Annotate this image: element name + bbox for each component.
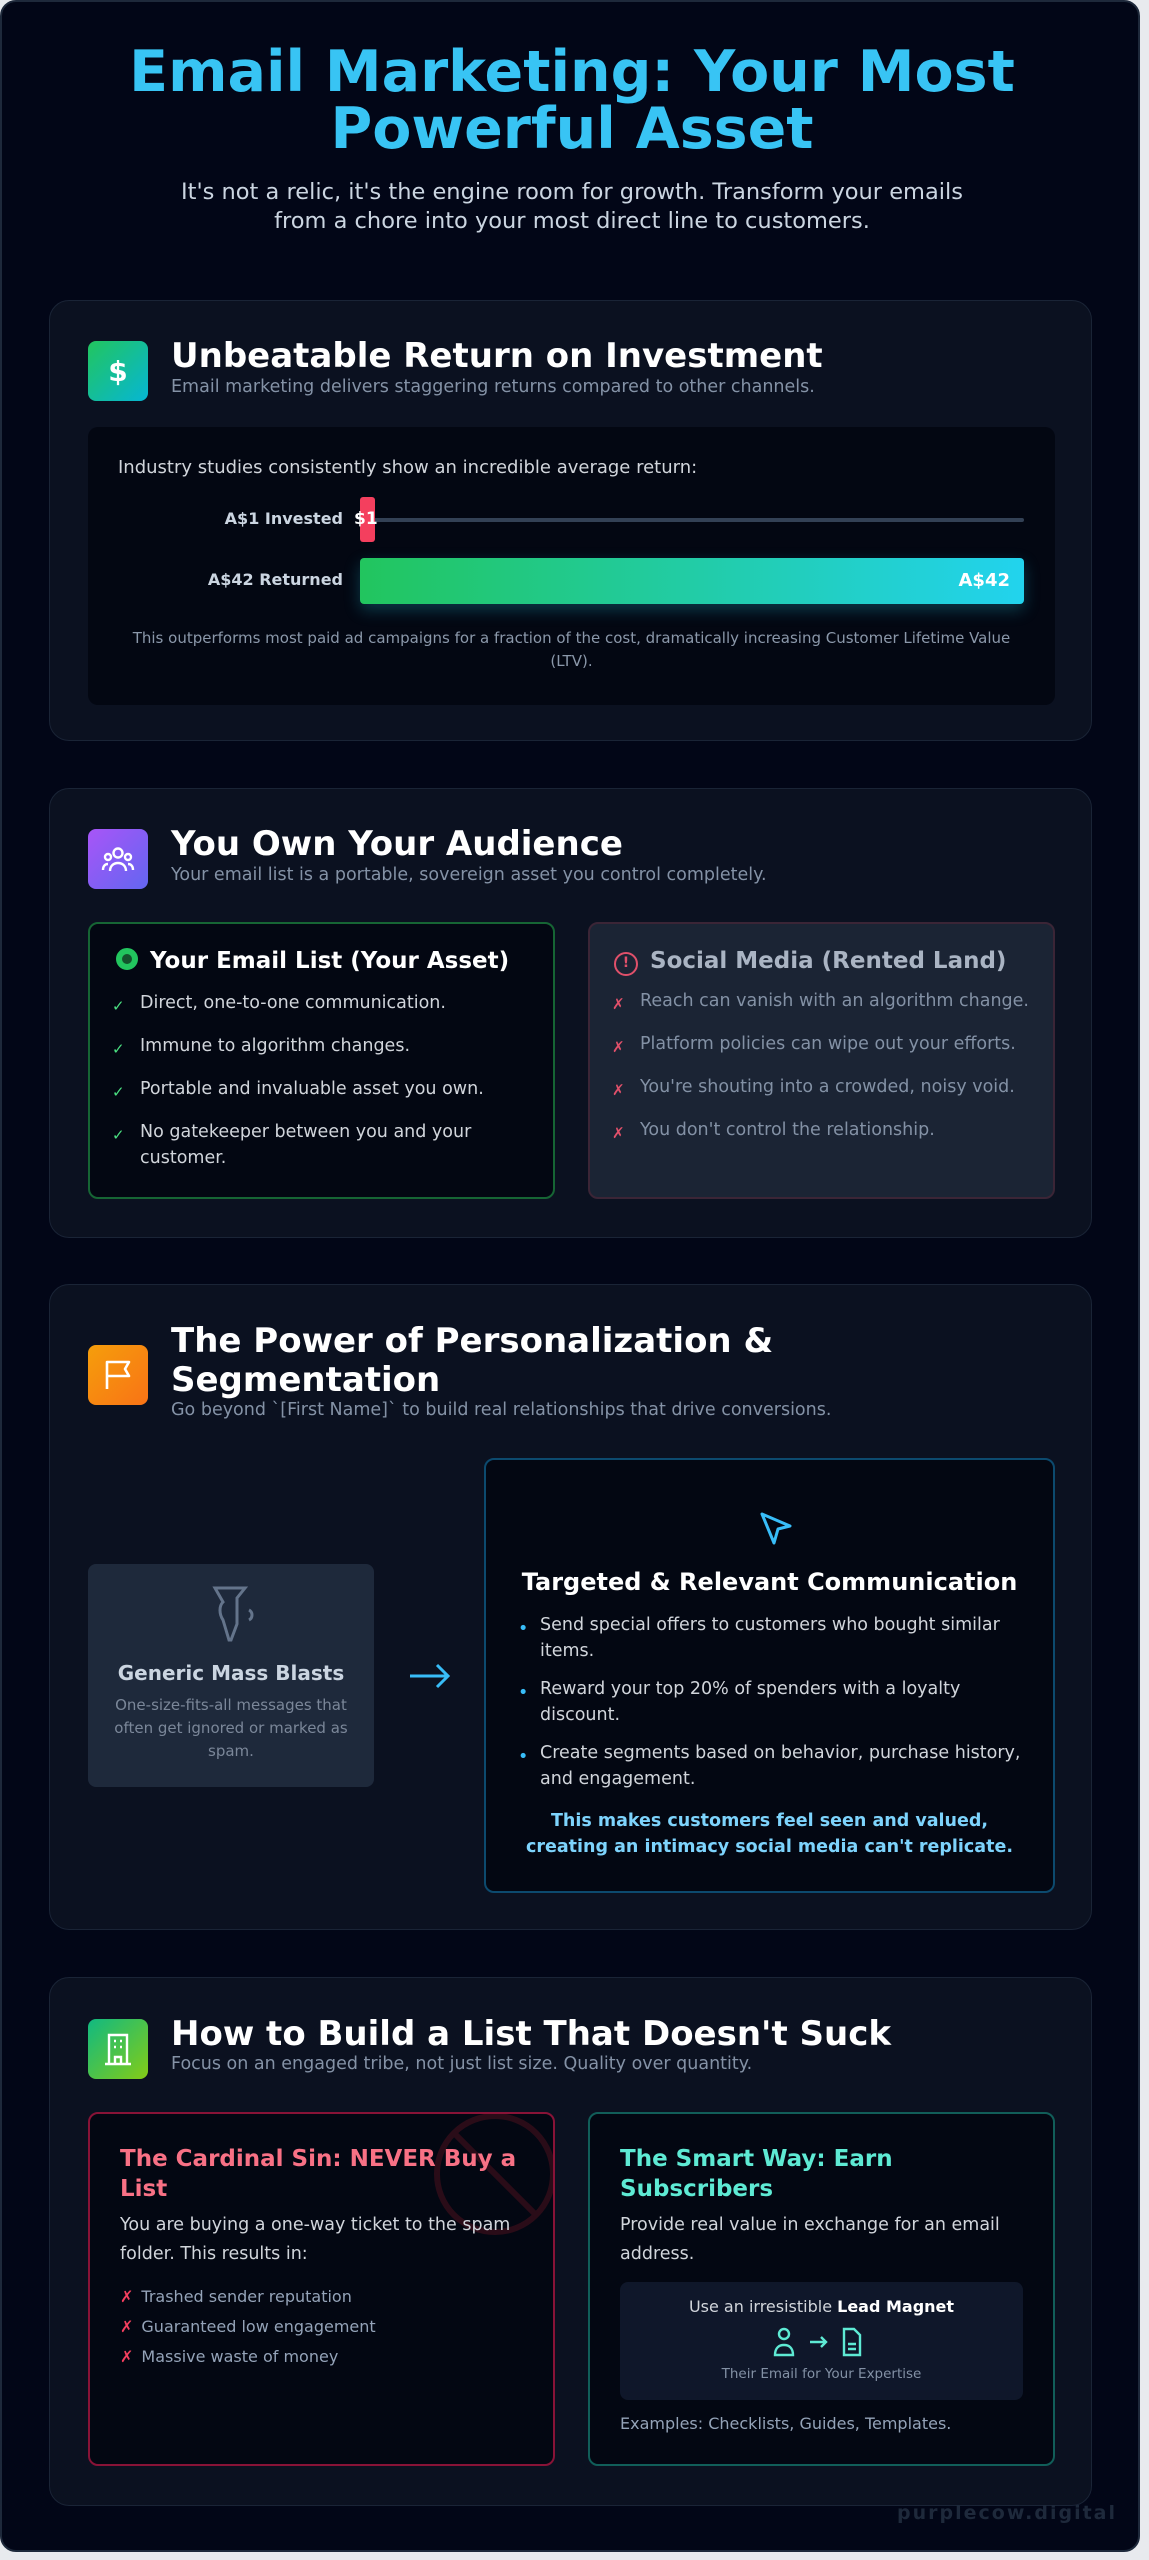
card: targeted xyxy=(484,1458,1055,1893)
heading: own audience: You Own Your Audience xyxy=(171,824,623,864)
card: smart way xyxy=(588,2112,1055,2466)
card: cardinal sin xyxy=(88,2112,555,2466)
list: risks: ✗ xyxy=(612,1124,625,1142)
panel: personalization xyxy=(49,1284,1092,1930)
list: risks: ✗ xyxy=(612,995,625,1013)
bar: returned: A$42 xyxy=(958,570,1010,591)
card text: Provide real value in exchange for an email address. xyxy=(620,2215,1000,2264)
list: risks xyxy=(612,991,1029,1142)
callout: This makes customers feel seen and valued, xyxy=(551,1811,988,1831)
bar: invested: A$1 Invested xyxy=(225,509,343,528)
card title: The Smart Way: Earn Subscribers xyxy=(620,2146,893,2202)
card description: One-size-fits-all messages that often get ignored or marked as spam. xyxy=(114,1696,348,1760)
list: benefits: Direct, one-to-one communication. xyxy=(140,993,446,1013)
card: social media xyxy=(588,922,1055,1199)
list: benefits: Immune to algorithm changes. xyxy=(140,1036,410,1056)
list: benefits: No gatekeeper between you and your customer. xyxy=(140,1122,471,1168)
icon: dollar xyxy=(88,341,148,401)
icon: megaphone xyxy=(212,1586,254,1642)
list: benefits xyxy=(112,993,484,1168)
card heading: Your Email List (Your Asset) xyxy=(150,948,509,974)
heading: personalization xyxy=(171,1321,773,1400)
list: risks: You don't control the relationship. xyxy=(640,1120,935,1140)
list: benefits: ✓ xyxy=(112,1040,125,1058)
callout: creating an intimacy social media can't replicate. xyxy=(526,1837,1013,1857)
list: risks: Reach can vanish with an algorithm change. xyxy=(640,991,1029,1011)
heading: personalization: Segmentation xyxy=(171,1360,440,1400)
list: consequences: ✗ Trashed sender reputation xyxy=(120,2287,352,2306)
lead magnet box xyxy=(620,2282,1023,2400)
bar: invested xyxy=(224,497,1024,542)
list: tactics: • xyxy=(518,1619,528,1639)
list: consequences: ✗ Massive waste of money xyxy=(120,2347,338,2366)
list: consequences: ✗ Guaranteed low engagement xyxy=(120,2317,376,2336)
panel: own audience xyxy=(49,788,1092,1238)
bar: invested: $1 xyxy=(354,509,378,529)
list: benefits: ✓ xyxy=(112,1126,125,1144)
card text: You are buying a one-way ticket to the spam folder. This results in: xyxy=(120,2215,510,2264)
list: benefits: Portable and invaluable asset you own. xyxy=(140,1079,484,1099)
callout xyxy=(526,1811,1013,1857)
list: benefits: ✓ xyxy=(112,1083,125,1101)
list: benefits: ✓ xyxy=(112,997,125,1015)
list: tactics xyxy=(518,1615,1020,1789)
subtitle: It's not a relic, it's the engine room for growth. Transform your emails xyxy=(181,179,963,205)
watermark: purplecow.digital xyxy=(897,2502,1117,2524)
heading: How to Build a List That Doesn't Suck xyxy=(171,2014,891,2054)
list: tactics: • xyxy=(518,1683,528,1703)
panel: ROI xyxy=(49,300,1092,741)
card title: The Cardinal Sin: NEVER Buy a List xyxy=(120,2146,516,2202)
icon: prohibited (decorative watermark) xyxy=(434,2114,553,2235)
chart footnote: This outperforms most paid ad campaigns for a fraction of the cost, dramatically increasing Customer Lifetime Value (LTV). xyxy=(133,629,1010,670)
list: risks: You're shouting into a crowded, noisy void. xyxy=(640,1077,1015,1097)
lead magnet box: Their Email for Your Expertise xyxy=(722,2366,921,2382)
list: tactics: • xyxy=(518,1747,528,1767)
icon: dollar: $ xyxy=(108,354,128,388)
list: tactics: Create segments based on behavior, purchase history, and engagement. xyxy=(540,1743,1020,1789)
card heading: Social Media (Rented Land) xyxy=(650,948,1006,974)
heading: ROI: Unbeatable Return on Investment xyxy=(171,336,823,376)
list: tactics: Send special offers to customers who bought similar items. xyxy=(540,1615,1000,1661)
subtitle xyxy=(181,179,963,234)
subheading: ROI: Email marketing delivers staggering returns compared to other channels. xyxy=(171,377,815,397)
chart: ROI bars xyxy=(88,427,1055,705)
subheading: Focus on an engaged tribe, not just list size. Quality over quantity. xyxy=(171,2054,752,2074)
subheading: Your email list is a portable, sovereign asset you control completely. xyxy=(171,865,767,885)
card heading: ! xyxy=(623,955,629,971)
subheading: Go beyond `[First Name]` to build real relationships that drive conversions. xyxy=(171,1400,831,1420)
examples text: Examples: Checklists, Guides, Templates. xyxy=(620,2414,951,2433)
subtitle: from a chore into your most direct line to customers. xyxy=(274,208,870,234)
card: email list xyxy=(88,922,555,1199)
card title: Targeted & Relevant Communication xyxy=(522,1568,1017,1596)
icon: users xyxy=(88,829,148,889)
arrow xyxy=(410,1664,450,1688)
heading: personalization: The Power of Personalization & xyxy=(171,1321,773,1361)
title: Email Marketing: Your Most xyxy=(129,39,1015,105)
card: generic blasts xyxy=(88,1564,374,1787)
chart intro text: Industry studies consistently show an incredible average return: xyxy=(118,457,697,478)
list: risks: Platform policies can wipe out your efforts. xyxy=(640,1034,1016,1054)
panel: build list xyxy=(49,1977,1092,2506)
bar: returned xyxy=(208,556,1032,618)
list: consequences xyxy=(120,2287,376,2366)
icon: building xyxy=(88,2019,148,2079)
list: risks: ✗ xyxy=(612,1081,625,1099)
icon: cursor xyxy=(760,1512,792,1544)
icons: user to document xyxy=(774,2328,862,2356)
list: risks: ✗ xyxy=(612,1038,625,1056)
card title: Generic Mass Blasts xyxy=(118,1661,344,1685)
title: Powerful Asset xyxy=(330,96,814,162)
bar: returned: A$42 Returned xyxy=(208,570,343,589)
icon: flag xyxy=(88,1345,148,1405)
lead magnet box: Use an irresistible Lead Magnet xyxy=(689,2297,954,2316)
title xyxy=(129,39,1015,162)
list: tactics: Reward your top 20% of spenders with a loyalty discount. xyxy=(540,1679,960,1725)
